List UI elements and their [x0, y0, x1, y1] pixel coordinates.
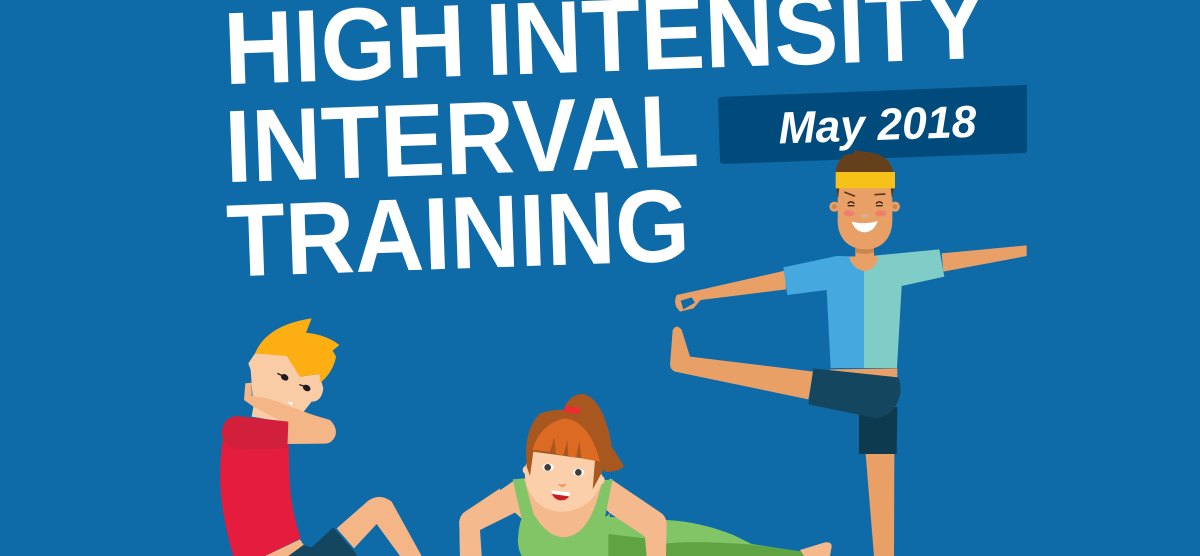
title: [222, 0, 989, 298]
figure: man balancing with raised leg: [670, 150, 1027, 556]
date badge: May 2018: [778, 96, 977, 153]
figure: boy doing sit-ups: [220, 318, 500, 556]
left arm: [459, 480, 525, 556]
body and legs: [518, 517, 803, 556]
arms and torso: [675, 150, 1027, 368]
title: INTERVAL: [223, 73, 700, 204]
ponytail: [565, 394, 624, 472]
green top: [513, 478, 613, 556]
date badge: [718, 85, 1027, 164]
figure: woman doing push-ups: [459, 394, 832, 556]
title: TRAINING: [225, 167, 691, 298]
legs and shorts: [670, 327, 901, 556]
right arm: [605, 478, 667, 556]
